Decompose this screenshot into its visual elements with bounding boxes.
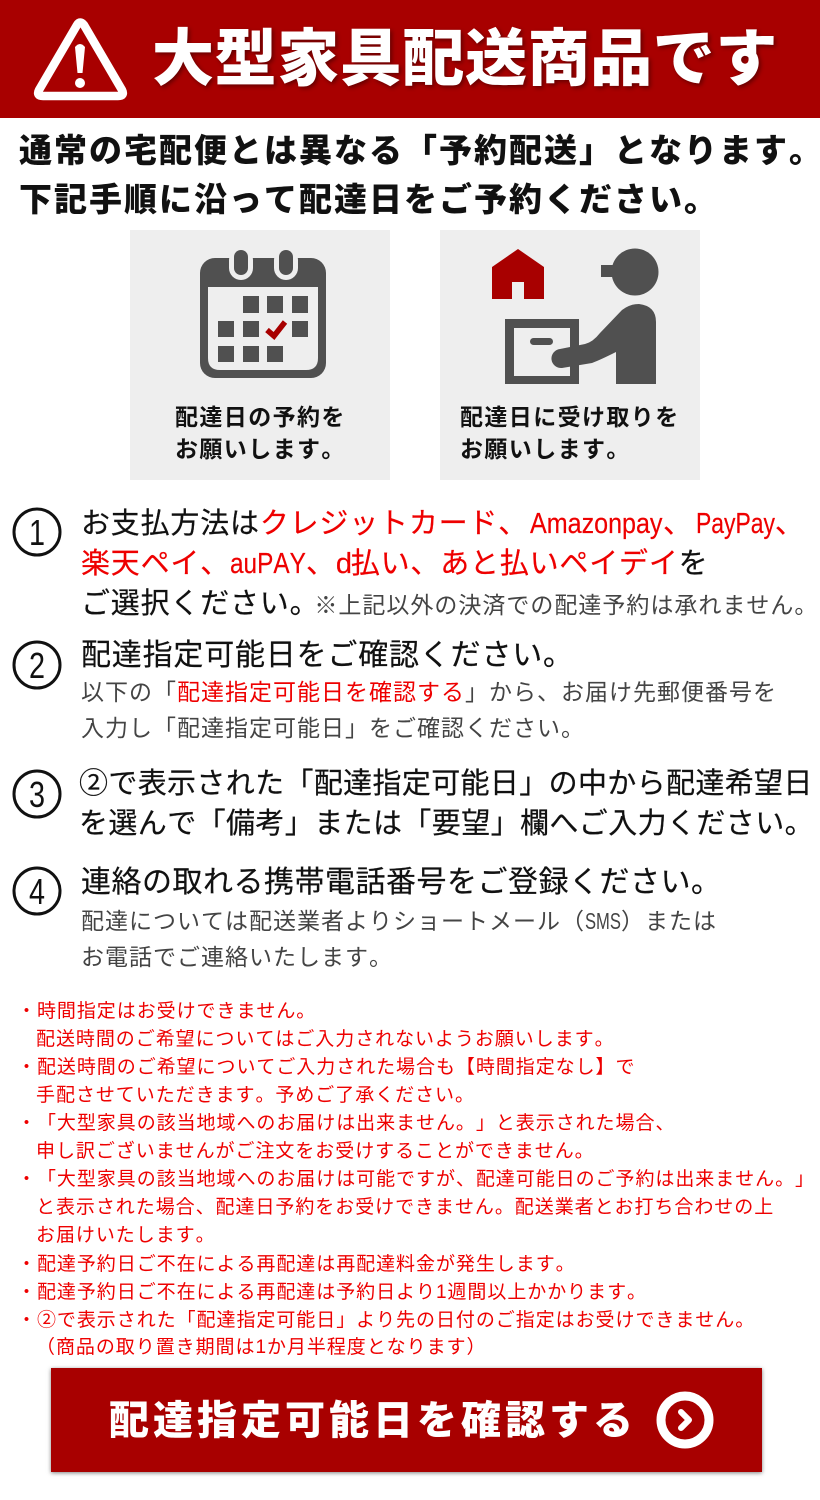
note 3 cont: 申し訳ございませんがご注文をお受けすることができません。 (36, 1141, 595, 1162)
step 4 line 1: 配達については配送業者よりショートメール（ ）または (81, 908, 717, 934)
panel: reserve delivery date (130, 230, 390, 480)
icon: calendar (200, 250, 326, 378)
intro line 1: 通常の宅配便とは異なる「予約配送」となります。 (19, 132, 820, 169)
note 1: ・時間指定はお受けできません。 (17, 1001, 316, 1022)
icon: delivery person with box and house (492, 248, 658, 384)
step 1 (12, 508, 818, 620)
step number 2: 2 (29, 645, 45, 686)
panel: receive on delivery date (440, 230, 700, 480)
note 7: ・②で表示された「配達指定可能日」より先の日付のご指定はお受けできません。 (17, 1310, 755, 1331)
step 3 (12, 768, 814, 840)
step 4 line 1: SMS (585, 908, 621, 934)
caption line 1: 配達日に受け取りを (460, 404, 680, 430)
intro text (19, 132, 820, 218)
step 2 line 1: 以下の「配達指定可能日を確認する」から、お届け先郵便番号を (81, 679, 777, 705)
note 5: ・配達予約日ご不在による再配達は再配達料金が発生します。 (17, 1254, 576, 1275)
note 6: ・配達予約日ご不在による再配達は予約日より1週間以上かかります。 (17, 1282, 647, 1303)
title: 大型家具配送商品です (152, 25, 778, 94)
step 3 line 1: ②で表示された「配達指定可能日」の中から配達希望日 (79, 768, 813, 800)
step number 3: 3 (29, 774, 45, 815)
caption line 1: 配達日の予約を (175, 404, 346, 430)
intro line 2: 下記手順に沿って配達日をご予約ください。 (19, 181, 719, 218)
step 1 line 1: PayPay (696, 508, 775, 540)
step 4 heading: 連絡の取れる携帯電話番号をご登録ください。 (81, 866, 722, 899)
step 3 line 2: を選んで「備考」または「要望」欄へご入力ください。 (79, 808, 814, 840)
step 4 (12, 866, 722, 970)
step 2 line 2: 入力し「配達指定可能日」をご確認ください。 (81, 715, 585, 741)
note 7 cont: （商品の取り置き期間は1か月半程度となります） (36, 1337, 486, 1358)
button: check available delivery dates (51, 1368, 762, 1472)
step 1 line 1: お支払方法はクレジットカード、 、 、 (81, 508, 805, 540)
red notes (17, 1001, 815, 1358)
step number 3 (12, 770, 62, 818)
step 1 line 2: 楽天ペイ、 、 払い、あと払いペイデイを (81, 548, 708, 580)
caption line 2: お願いします。 (460, 436, 631, 462)
note 4: ・「大型家具の該当地域へのお届けは可能ですが、配達可能日のご予約は出来ません。」 (17, 1169, 815, 1190)
step number 1: 1 (29, 512, 45, 553)
step number 4: 4 (29, 871, 45, 912)
step 4 line 2: お電話でご連絡いたします。 (81, 944, 393, 970)
step 1 line 1: Amazonpay (530, 508, 662, 540)
step number 4 (12, 866, 62, 916)
note 3: ・「大型家具の該当地域へのお届けは出来ません。」と表示された場合、 (17, 1113, 675, 1134)
step number 2 (12, 640, 62, 690)
step 1 line 2: auPAY (230, 548, 306, 580)
note 4 cont 2: お届けいたします。 (36, 1225, 216, 1246)
step 1 line 3: ご選択ください。※上記以外の決済での配達予約は承れません。 (81, 588, 818, 620)
step number 1 (12, 508, 62, 556)
caption (175, 404, 346, 462)
step 2 heading: 配達指定可能日をご確認ください。 (81, 639, 574, 672)
note 2: ・配送時間のご希望についてご入力された場合も【時間指定なし】で (17, 1057, 635, 1078)
caption (460, 404, 680, 462)
note 1 cont: 配送時間のご希望についてはご入力されないようお願いします。 (36, 1029, 615, 1050)
note 2 cont: 手配させていただきます。予めご了承ください。 (36, 1085, 475, 1106)
note 4 cont 1: と表示された場合、配達日予約をお受けできません。配送業者とお打ち合わせの上 (36, 1197, 774, 1218)
button label: 配達指定可能日を確認する (109, 1399, 637, 1443)
step 1 line 2: d (336, 548, 352, 580)
icon: circled chevron (656, 1392, 714, 1448)
step 2 (12, 639, 777, 741)
caption line 2: お願いします。 (175, 436, 346, 462)
icon: warning triangle (34, 18, 128, 100)
header banner (0, 0, 820, 118)
